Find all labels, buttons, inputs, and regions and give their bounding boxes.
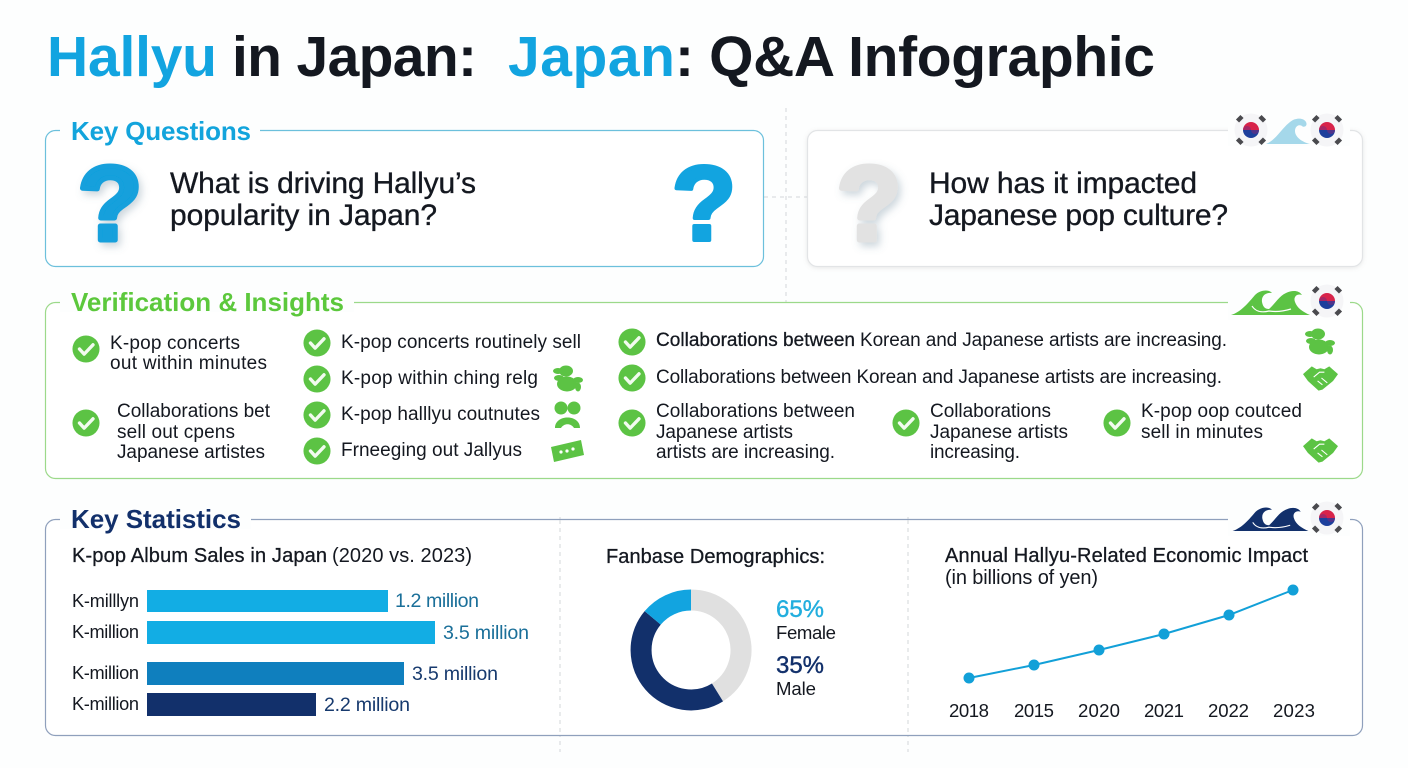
panel: key statistics	[46, 502, 1362, 736]
icon: navy waves and flag	[1233, 502, 1344, 534]
check items column 1	[72, 333, 271, 463]
icon: blue question mark left: ?	[78, 145, 142, 263]
icon: ticket	[551, 440, 584, 462]
heading: key statistics: Key Statistics	[71, 504, 241, 534]
check items column 2: K-pop halllyu coutnutes	[341, 404, 540, 425]
title: : Q&A Infographic	[675, 25, 1155, 89]
line chart: economic impact: 2015	[1014, 700, 1054, 721]
donut chart: fanbase demographics: 35%	[776, 652, 824, 679]
icon: blue question mark right: ?	[672, 145, 736, 263]
chart title: (2020 vs. 2023)	[332, 545, 472, 567]
donut chart: fanbase demographics: Female	[776, 622, 836, 643]
question text 1: What is driving Hallyu’s	[170, 167, 476, 200]
check items column 4: Collaborations	[930, 401, 1051, 422]
title: Japan	[508, 25, 675, 89]
check items column 2: K-pop concerts routinely sell	[341, 332, 581, 353]
check items column 3: Korean and Japanese artists are increasing.	[860, 330, 1227, 351]
donut chart: fanbase demographics: 65%	[776, 596, 824, 623]
check items column 5: sell in minutes	[1141, 422, 1263, 443]
check items column 3: Collaborations between	[656, 330, 855, 351]
bar chart: album sales: K-million	[72, 694, 139, 714]
bar chart: album sales: K-million	[72, 622, 139, 642]
check items column 3: artists are increasing.	[656, 442, 835, 463]
check items column 2: Frneeging out Jallyus	[341, 440, 522, 461]
line chart: economic impact: 2020	[1078, 700, 1120, 721]
question text 1: popularity in Japan?	[170, 199, 437, 232]
icon: gray question mark: ?	[837, 145, 901, 263]
icon: handshake lower	[1303, 438, 1338, 463]
icon: green waves and flag	[1231, 284, 1344, 318]
donut chart: fanbase demographics	[606, 546, 836, 700]
donut chart: fanbase demographics: Male	[776, 678, 816, 699]
check items column 2: K-pop within ching relg	[341, 368, 538, 389]
panel: key question 1	[46, 116, 764, 266]
line chart: economic impact: 2022	[1208, 700, 1249, 721]
chart title	[945, 545, 1308, 589]
icon: people	[554, 402, 580, 428]
check items column 1: Japanese artistes	[117, 442, 265, 463]
title: Hallyu	[47, 25, 217, 89]
check items column 1: out within minutes	[110, 353, 267, 374]
bar chart: album sales: 3.5 million	[412, 663, 498, 685]
check items column 5: K-pop oop coutced	[1141, 401, 1302, 422]
chart title: K-pop Album Sales in Japan	[72, 545, 327, 567]
panel: verification and insights	[46, 284, 1362, 478]
line chart: economic impact	[945, 545, 1315, 721]
check items column 5	[1103, 401, 1302, 443]
icon: clover	[553, 366, 583, 392]
title	[47, 25, 1155, 89]
bar chart: album sales: 3.5 million	[443, 622, 529, 644]
heading: verification: Verification & Insights	[71, 287, 344, 317]
line chart: economic impact: 2021	[1144, 700, 1184, 721]
chart title: Annual Hallyu-Related Economic Impact	[945, 545, 1308, 567]
chart title: Fanbase Demographics:	[606, 546, 825, 568]
chart title	[72, 545, 472, 567]
check items column 4: Japanese artists	[930, 422, 1068, 443]
bar chart: album sales: 1.2 million	[395, 590, 479, 612]
check items column 1: K-pop concerts	[110, 333, 240, 354]
check items column 2	[303, 329, 581, 465]
question text 2	[929, 167, 1228, 232]
line chart: economic impact: 2018	[949, 700, 989, 721]
icon: flags and wave	[1234, 114, 1344, 146]
check items column 1: Collaborations bet	[117, 401, 271, 422]
icon: clover right	[1305, 328, 1335, 354]
check items column 3: Collaborations between Korean and Japanese artists are increasing.	[656, 367, 1222, 388]
chart title: (in billions of yen)	[945, 567, 1098, 589]
check items column 3: Japanese artists	[656, 422, 793, 443]
check items column 3: Collaborations between	[656, 401, 855, 422]
check items column 4	[892, 401, 1068, 463]
title: in Japan:	[232, 25, 477, 89]
bar chart: album sales: 2.2 million	[324, 694, 410, 716]
bar chart: album sales: K-milllyn	[72, 591, 139, 611]
icon: handshake upper	[1303, 366, 1338, 391]
check items column 4: increasing.	[930, 442, 1020, 463]
check items column 1: sell out cpens	[117, 422, 235, 443]
check items column 3	[618, 328, 1227, 463]
panel: key question 2	[808, 110, 1362, 266]
heading: key questions: Key Questions	[71, 116, 251, 146]
question text 1	[170, 167, 476, 232]
question text 2: How has it impacted	[929, 167, 1197, 200]
bar chart: album sales	[72, 545, 529, 716]
bar chart: album sales: K-million	[72, 663, 139, 683]
line chart: economic impact: 2023	[1273, 700, 1315, 721]
question text 2: Japanese pop culture?	[929, 199, 1228, 232]
